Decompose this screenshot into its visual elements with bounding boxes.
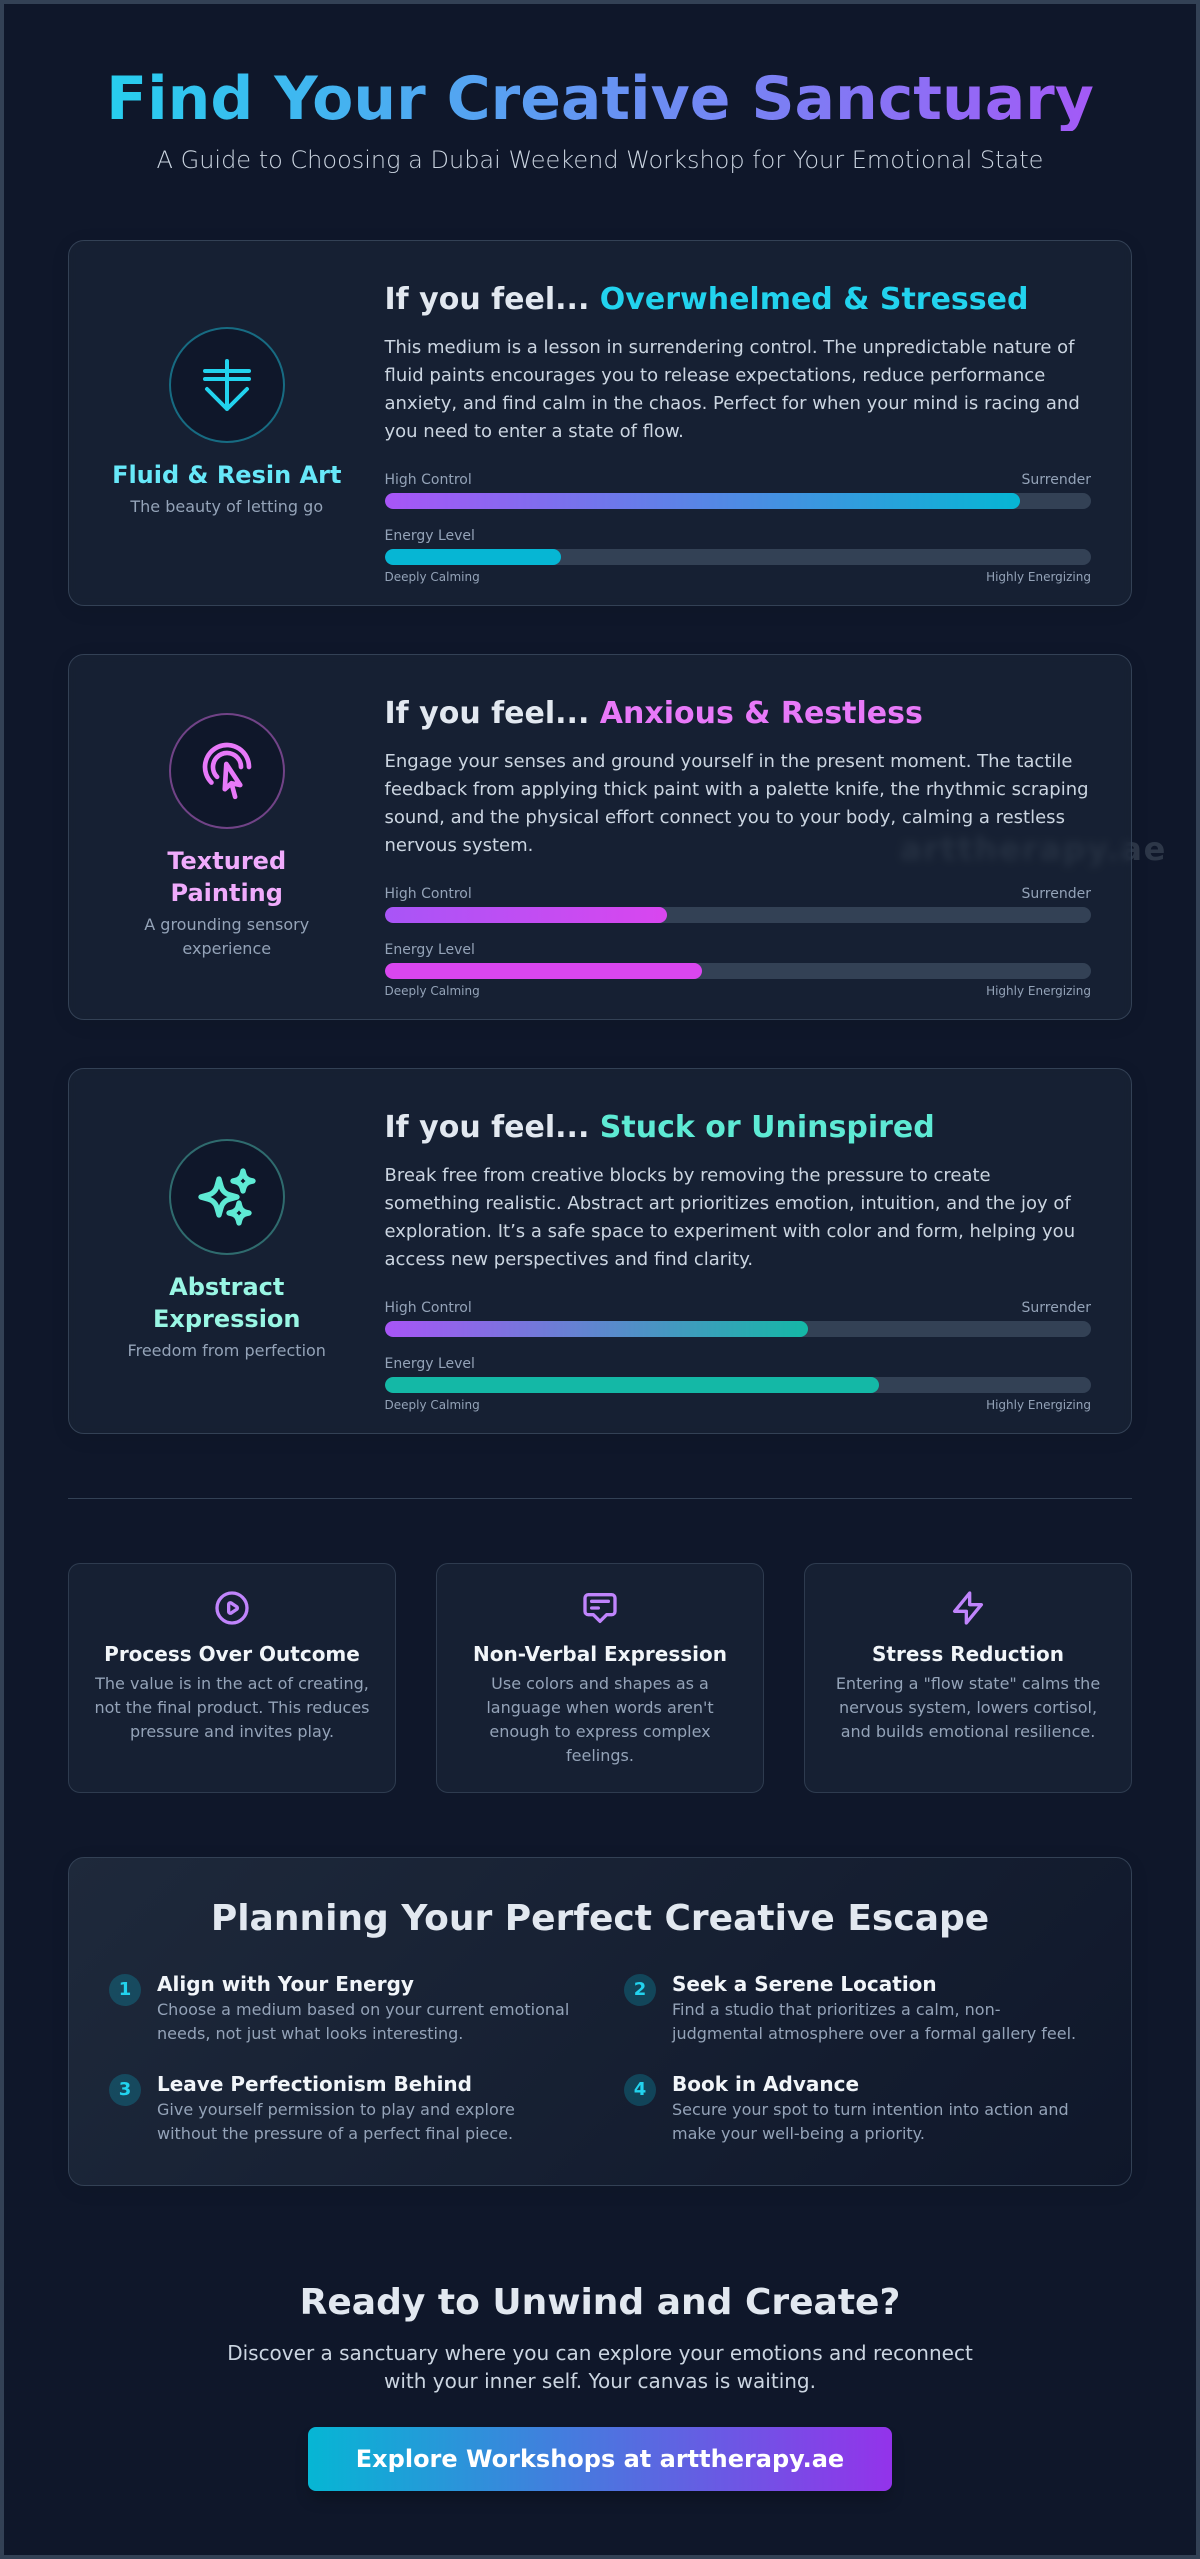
detail column <box>384 282 1091 584</box>
control scale labels: High Control <box>384 886 472 902</box>
energy scale labels: Deeply Calming <box>384 570 480 584</box>
card heading: If you feel... Anxious & Restless <box>384 696 923 731</box>
detail column <box>384 696 1091 998</box>
control scale labels: Surrender <box>1022 886 1091 902</box>
card heading: If you feel... Overwhelmed & Stressed <box>384 282 1028 317</box>
benefit text: Use colors and shapes as a language when words aren't enough to express complex feelings. <box>486 1674 714 1765</box>
step text: Book in Advance <box>672 2072 859 2096</box>
energy scale labels: Deeply Calming <box>384 1398 480 1412</box>
energy label: Energy Level <box>384 942 475 958</box>
bar: energy <box>384 963 1091 979</box>
call to action button: Explore Workshops at arttherapy.ae <box>356 2445 844 2473</box>
medium name: Fluid & Resin Art <box>112 461 341 489</box>
medium column: abstract expression <box>128 1139 326 1360</box>
call to action text: Discover a sanctuary where you can explore your emotions and reconnect with your inner self. Your canvas is waiting. <box>227 2341 973 2393</box>
icon: sparkles <box>169 1139 285 1255</box>
step text <box>672 1972 1076 2043</box>
step text: Seek a Serene Location <box>672 1972 937 1996</box>
panel: stress reduction <box>804 1563 1132 1793</box>
description: Break free from creative blocks by removing the pressure to create something realistic. Abstract art prioritizes emotion, intuition, and the joy of exploration. It’s a safe space to experiment with color and form, helping you access new perspectives and find clarity. <box>384 1165 1075 1270</box>
planning steps <box>109 1972 1076 2143</box>
panel: abstract expression <box>68 1068 1132 1434</box>
bar: control <box>384 1321 1091 1337</box>
control scale labels <box>384 886 1091 902</box>
icon: fluid arrow <box>169 327 285 443</box>
card heading: If you feel... Stuck or Uninspired <box>384 1110 935 1145</box>
step 4 <box>624 2072 1069 2143</box>
energy scale labels: Deeply Calming <box>384 984 480 998</box>
control scale labels <box>384 1300 1091 1316</box>
medium tagline: A grounding sensory experience <box>144 915 309 958</box>
description: This medium is a lesson in surrendering control. The unpredictable nature of fluid paints encourages you to release expectations, reduce performance anxiety, and find calm in the chaos. Perfect for when your mind is racing and you need to enter a state of flow. <box>384 337 1080 442</box>
benefit text: Entering a "flow state" calms the nervous system, lowers cortisol, and builds emotional resilience. <box>836 1674 1100 1741</box>
panel: process over outcome <box>68 1563 396 1793</box>
icon: play circle <box>215 1591 249 1625</box>
energy scale labels: Highly Energizing <box>986 984 1091 998</box>
medium column: textured painting <box>144 713 309 958</box>
icon: lightning bolt <box>952 1591 984 1625</box>
control scale labels: High Control <box>384 1300 472 1316</box>
step number: 1 <box>119 1979 131 2000</box>
medium tagline: The beauty of letting go <box>130 497 323 516</box>
step 1 <box>109 1972 569 2043</box>
step text: Align with Your Energy <box>157 1972 414 1996</box>
control scale labels <box>384 472 1091 488</box>
step number <box>624 1974 656 2006</box>
step number: 2 <box>634 1979 646 2000</box>
panel: fluid and resin art <box>68 240 1132 606</box>
step text: Leave Perfectionism Behind <box>157 2072 472 2096</box>
energy label: Energy Level <box>384 1356 475 1372</box>
step text: Give yourself permission to play and explore without the pressure of a perfect final piece. <box>157 2100 515 2143</box>
description: Engage your senses and ground yourself in the present moment. The tactile feedback from applying thick paint with a palette knife, the rhythmic scraping sound, and the physical effort connect you to your body, calming a restless nervous system. <box>384 751 1089 856</box>
medium name: Textured Painting <box>167 847 286 907</box>
bar: energy <box>384 549 1091 565</box>
icon: cursor ripple <box>169 713 285 829</box>
panel: textured painting <box>68 654 1132 1020</box>
energy scale labels <box>384 1398 1091 1412</box>
step number: 4 <box>634 2079 646 2100</box>
control scale labels: Surrender <box>1022 1300 1091 1316</box>
step text: Choose a medium based on your current emotional needs, not just what looks interesting. <box>157 2000 569 2043</box>
energy scale labels <box>384 570 1091 584</box>
watermark: arttherapy.ae <box>900 830 1167 868</box>
benefit heading: Non-Verbal Expression <box>473 1642 727 1666</box>
subtitle: A Guide to Choosing a Dubai Weekend Workshop for Your Emotional State <box>157 146 1043 174</box>
energy scale labels: Highly Energizing <box>986 570 1091 584</box>
icon: speech bubble <box>583 1593 617 1624</box>
energy scale labels: Highly Energizing <box>986 1398 1091 1412</box>
step number <box>624 2074 656 2106</box>
step number <box>109 1974 141 2006</box>
step 3 <box>109 2072 515 2143</box>
step text: Find a studio that prioritizes a calm, non-judgmental atmosphere over a formal gallery feel. <box>672 2000 1076 2043</box>
energy scale labels <box>384 984 1091 998</box>
step text: Secure your spot to turn intention into action and make your well-being a priority. <box>672 2100 1069 2143</box>
benefit heading: Process Over Outcome <box>104 1642 360 1666</box>
call to action button <box>308 2427 892 2491</box>
medium tagline: Freedom from perfection <box>128 1341 326 1360</box>
detail column <box>384 1110 1091 1412</box>
step number <box>109 2074 141 2106</box>
call to action heading: Ready to Unwind and Create? <box>300 2282 900 2323</box>
benefit heading: Stress Reduction <box>872 1642 1064 1666</box>
step text <box>157 2072 515 2143</box>
medium name: Abstract Expression <box>153 1273 301 1333</box>
bar: energy <box>384 1377 1091 1393</box>
step number: 3 <box>119 2079 131 2100</box>
panel: planning <box>68 1857 1132 2186</box>
panel: non-verbal expression <box>436 1563 764 1793</box>
planning heading: Planning Your Perfect Creative Escape <box>211 1898 989 1939</box>
benefit text: The value is in the act of creating, not the final product. This reduces pressure and invites play. <box>94 1674 370 1741</box>
energy label: Energy Level <box>384 528 475 544</box>
step 2 <box>624 1972 1076 2043</box>
title: Find Your Creative Sanctuary <box>106 64 1094 134</box>
step text <box>157 1972 569 2043</box>
medium column: fluid and resin art <box>112 327 341 516</box>
control scale labels: High Control <box>384 472 472 488</box>
bar: control <box>384 493 1091 509</box>
control scale labels: Surrender <box>1022 472 1091 488</box>
bar: control <box>384 907 1091 923</box>
step text <box>672 2072 1069 2143</box>
